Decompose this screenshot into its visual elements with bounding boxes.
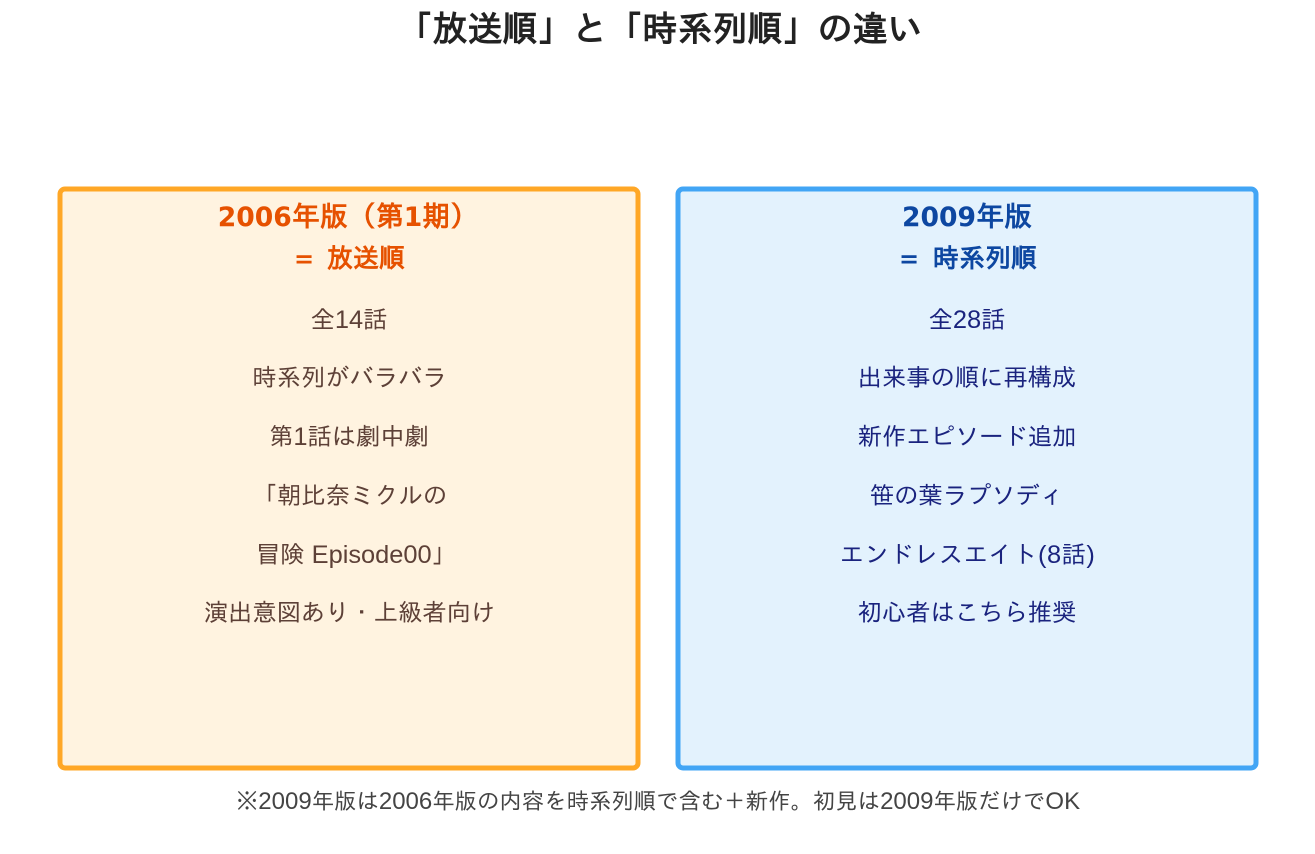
title: 「放送順」と「時系列順」の違い (398, 10, 922, 49)
list: 2006 features: 「朝比奈ミクルの (253, 483, 447, 510)
panel: 2006 version (60, 189, 638, 768)
list: 2009 features: 新作エピソード追加 (858, 424, 1076, 451)
list: 2009 features (840, 306, 1095, 627)
panel heading: 2009: 2009年版 (902, 201, 1032, 233)
list: 2006 features: 第1話は劇中劇 (269, 423, 429, 451)
panel heading: 2006: 2006年版（第1期） (218, 201, 478, 233)
panel: 2009 version (678, 189, 1256, 768)
panel subheading: chronological order: 時系列順 (933, 243, 1037, 273)
panel subheading: chronological order: = (899, 245, 919, 273)
list: 2009 features: 笹の葉ラプソディ (870, 483, 1064, 510)
list: 2006 features: 演出意図あり・上級者向け (204, 600, 495, 627)
list: 2006 features: 全14話 (311, 306, 387, 334)
list: 2006 features: 冒険 Episode00」 (256, 541, 456, 569)
panel subheading: broadcast order: = (294, 245, 314, 273)
list: 2009 features: エンドレスエイト(8話) (840, 541, 1095, 569)
footnote: ※2009年版は2006年版の内容を時系列順で含む＋新作。初見は2009年版だけでOK (236, 788, 1080, 815)
list: 2009 features: 全28話 (929, 306, 1005, 334)
list: 2009 features: 初心者はこちら推奨 (858, 600, 1076, 627)
panel subheading: broadcast order: 放送順 (327, 243, 405, 273)
list: 2006 features: 時系列がバラバラ (252, 365, 447, 392)
list: 2009 features: 出来事の順に再構成 (858, 365, 1076, 392)
list: 2006 features (204, 306, 495, 627)
